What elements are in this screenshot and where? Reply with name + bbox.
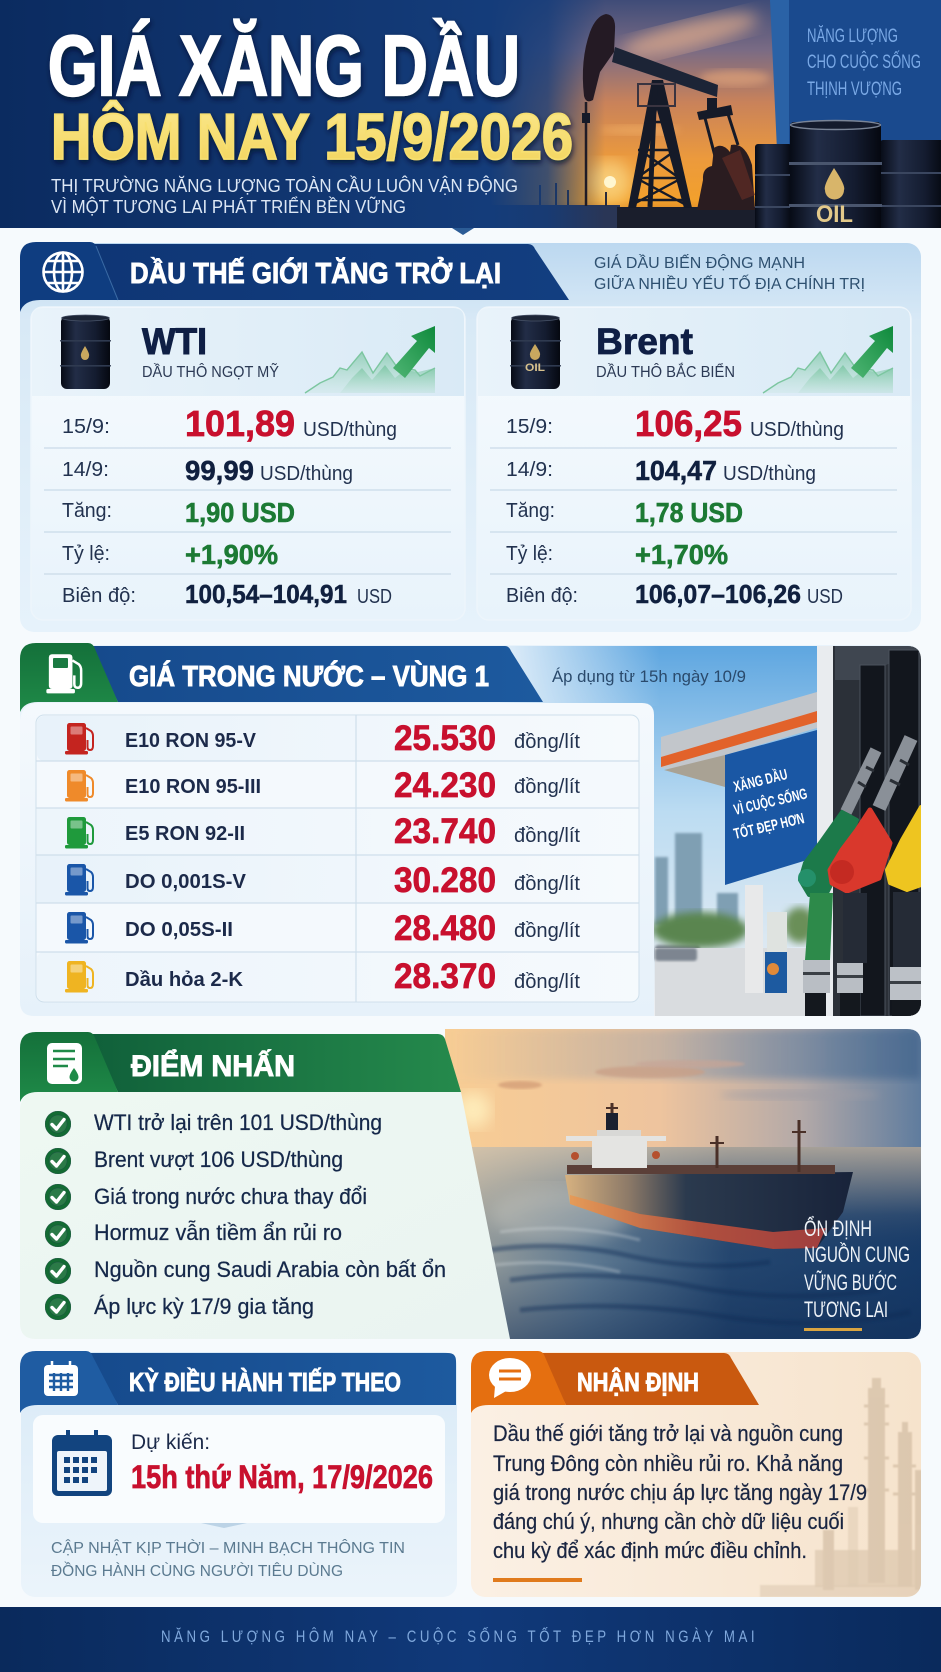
- header ribbon: domestic: [20, 643, 543, 712]
- fuel dispenser: [817, 646, 923, 1016]
- Brent rows: 1,78 USD: [635, 497, 743, 528]
- station sign: XĂNG DẦU: [732, 766, 789, 796]
- photo caption: ỔN ĐỊNH: [804, 1216, 872, 1241]
- Brent rows: 106,07–106,26: [635, 579, 801, 609]
- assessment body: Dầu thế giới tăng trở lại và nguồn cung: [493, 1421, 843, 1446]
- nozzle: green: [798, 750, 876, 1016]
- WTI barrel: [60, 315, 111, 389]
- panel: next adjustment: [20, 1351, 457, 1597]
- highlights list background: [20, 1092, 510, 1339]
- hero banner: [0, 0, 941, 234]
- tanker: [565, 1103, 853, 1249]
- row: E10 RON 95-III: E10 RON 95-III: [125, 776, 261, 798]
- header ribbon: world oil: DẦU THẾ GIỚI TĂNG TRỞ LẠI: [130, 256, 501, 290]
- Brent rows: [490, 403, 897, 609]
- WTI rows: 14/9:: [62, 459, 109, 481]
- panel: world oil: [20, 242, 921, 632]
- icon: speech bubble: [489, 1358, 531, 1398]
- WTI trend chart: [305, 326, 435, 393]
- icon: large calendar: [52, 1430, 112, 1496]
- Brent barrel: [510, 315, 561, 389]
- oil barrels: [755, 120, 941, 234]
- expected label: Dự kiến:: [131, 1431, 210, 1454]
- header ribbon: highlights: ĐIỂM NHẤN: [131, 1049, 295, 1083]
- header ribbon: world oil: [20, 242, 569, 312]
- Brent barrel: OIL: [525, 362, 545, 374]
- header ribbon: assessment: [471, 1351, 759, 1413]
- WTI rows: USD: [357, 586, 392, 608]
- header ribbon: assessment: NHẬN ĐỊNH: [577, 1367, 699, 1397]
- Brent rows: USD/thùng: [750, 419, 844, 441]
- Brent trend chart: [763, 326, 893, 393]
- commitment note: ĐỒNG HÀNH CÙNG NGƯỜI TIÊU DÙNG: [51, 1561, 343, 1580]
- WTI rows: Tăng:: [62, 500, 112, 522]
- assessment body: giá trong nước chịu áp lực tăng ngày 17/9: [493, 1480, 867, 1505]
- highlights list: [45, 1110, 446, 1320]
- header ribbon: domestic: GIÁ TRONG NƯỚC – VÙNG 1: [129, 659, 489, 693]
- WTI rows: Tỷ lệ:: [62, 543, 110, 565]
- header ribbon: next adjustment: [20, 1351, 456, 1413]
- pumpjack silhouette: [582, 14, 755, 210]
- hero tagline panel: NĂNG LƯỢNG: [807, 26, 898, 47]
- icon: globe: [44, 252, 82, 292]
- accent bar: [493, 1578, 582, 1582]
- WTI rows: USD/thùng: [303, 419, 397, 441]
- hero sunset photo: [490, 0, 780, 228]
- row: E10 RON 95-V: đồng/lít: [514, 731, 580, 753]
- station sign: VÌ CUỘC SỐNG: [732, 784, 809, 819]
- row: E5 RON 92-II: 23.740: [394, 812, 496, 851]
- oil barrels: OIL: [816, 201, 853, 228]
- station sign: TỐT ĐẸP HƠN: [732, 809, 806, 843]
- Brent rows: Tăng:: [506, 500, 555, 522]
- assessment body: Trung Đông còn nhiều rủi ro. Khả năng: [493, 1451, 843, 1476]
- title line 1: GIÁ XĂNG DẦU: [48, 18, 520, 114]
- panel: domestic prices: [20, 643, 923, 1016]
- WTI subtitle: DẦU THÔ NGỌT MỸ: [142, 361, 279, 381]
- panel: assessment: [471, 1351, 923, 1597]
- WTI name: WTI: [142, 321, 207, 362]
- price table: [36, 715, 639, 1002]
- title line 2: HÔM NAY 15/9/2026: [51, 100, 573, 173]
- header ribbon: next adjustment: KỲ ĐIỀU HÀNH TIẾP THEO: [129, 1367, 401, 1397]
- WTI rows: 101,89: [185, 403, 295, 444]
- header note: GIỮA NHIỀU YẾU TỐ ĐỊA CHÍNH TRỊ: [594, 273, 865, 293]
- row: E5 RON 92-II: [65, 812, 580, 851]
- highlights list: WTI trở lại trên 101 USD/thùng: [94, 1110, 382, 1135]
- WTI rows: Biên độ:: [62, 585, 136, 607]
- hero subtitle: THỊ TRƯỜNG NĂNG LƯỢNG TOÀN CẦU LUÔN VẬN ĐỘNG: [51, 175, 518, 196]
- assessment body: [493, 1421, 867, 1563]
- panel: highlights: [20, 1029, 921, 1339]
- hero tagline panel: THỊNH VƯỢNG: [807, 79, 902, 100]
- Brent subtitle: DẦU THÔ BẮC BIỂN: [596, 362, 735, 381]
- row: DO 0,05S-II: [65, 909, 580, 948]
- highlights list: Brent vượt 106 USD/thùng: [94, 1147, 343, 1172]
- photo: petrol station: [500, 646, 923, 1016]
- Brent rows: 106,25: [635, 403, 742, 444]
- Brent rows: 14/9:: [506, 459, 553, 481]
- highlights list: Áp lực kỳ 17/9 gia tăng: [94, 1294, 314, 1319]
- Brent name: Brent: [596, 321, 693, 362]
- row: E5 RON 92-II: E5 RON 92-II: [125, 823, 245, 845]
- WTI rows: [44, 403, 451, 609]
- row: E5 RON 92-II: đồng/lít: [514, 825, 580, 847]
- commitment note: [51, 1538, 405, 1580]
- row: DO 0,05S-II: đồng/lít: [514, 920, 580, 942]
- left prices background: [20, 703, 654, 1016]
- row: DO 0,001S-V: đồng/lít: [514, 873, 580, 895]
- hero tagline panel: [770, 0, 941, 150]
- WTI rows: 15/9:: [62, 416, 110, 438]
- photo caption: VỮNG BƯỚC: [804, 1270, 897, 1295]
- footer: [0, 1607, 941, 1672]
- photo caption: TƯƠNG LAI: [804, 1297, 888, 1322]
- row: E10 RON 95-III: 24.230: [394, 766, 496, 805]
- row: E10 RON 95-III: đồng/lít: [514, 776, 580, 798]
- hero pointer arrow: [452, 228, 474, 235]
- Brent rows: 104,47: [635, 455, 717, 486]
- nozzle: red: [830, 738, 911, 1016]
- row: DO 0,05S-II: 28.480: [394, 909, 496, 948]
- WTI rows: 99,99: [185, 455, 254, 486]
- highlights list: Nguồn cung Saudi Arabia còn bất ổn: [94, 1257, 446, 1282]
- highlights list: Hormuz vẫn tiềm ẩn rủi ro: [94, 1220, 342, 1245]
- hero subtitle: VÌ MỘT TƯƠNG LAI PHÁT TRIỂN BỀN VỮNG: [51, 196, 406, 217]
- hero subtitle: [51, 175, 518, 217]
- row: E10 RON 95-V: E10 RON 95-V: [125, 730, 257, 752]
- icon: white fuel pump: [46, 654, 81, 693]
- Brent rows: USD: [807, 586, 843, 608]
- effective time note: Áp dụng từ 15h ngày 10/9: [552, 667, 746, 686]
- header ribbon: highlights: [20, 1032, 461, 1102]
- header note: GIÁ DẦU BIẾN ĐỘNG MẠNH: [594, 253, 805, 272]
- row: E10 RON 95-V: [65, 719, 580, 758]
- Brent rows: +1,70%: [635, 539, 728, 570]
- row: DO 0,001S-V: DO 0,001S-V: [125, 871, 247, 893]
- card: Brent: [477, 307, 911, 620]
- expected date: 15h thứ Năm, 17/9/2026: [131, 1459, 433, 1495]
- Brent rows: 15/9:: [506, 416, 553, 438]
- WTI rows: +1,90%: [185, 539, 278, 570]
- Brent rows: Biên độ:: [506, 585, 578, 607]
- row: Dầu hỏa 2-K: đồng/lít: [514, 971, 580, 993]
- station sign: [725, 730, 817, 885]
- photo caption: [804, 1216, 910, 1331]
- assessment body: đáng chú ý, nhưng cần chờ dữ liệu cuối: [493, 1509, 844, 1534]
- WTI rows: USD/thùng: [260, 463, 353, 485]
- row: DO 0,001S-V: 30.280: [394, 861, 496, 900]
- row: DO 0,001S-V: [65, 861, 580, 900]
- small pointer: [201, 1523, 247, 1528]
- row: Dầu hỏa 2-K: Dầu hỏa 2-K: [125, 969, 244, 991]
- icon: small calendar: [44, 1361, 78, 1396]
- WTI rows: 100,54–104,91: [185, 579, 347, 609]
- highlights list: Giá trong nước chưa thay đổi: [94, 1184, 367, 1209]
- photo: oil tanker at sea: [445, 1029, 921, 1339]
- row: E10 RON 95-V: 25.530: [394, 719, 496, 758]
- header note: [594, 253, 865, 293]
- refinery background: [760, 1378, 923, 1597]
- row: Dầu hỏa 2-K: [65, 957, 580, 996]
- assessment body: chu kỳ để xác định mức điều chỉnh.: [493, 1538, 807, 1563]
- row: DO 0,05S-II: DO 0,05S-II: [125, 919, 233, 941]
- footer: NĂNG LƯỢNG HÔM NAY – CUỘC SỐNG TỐT ĐẸP HƠN NGÀY MAI: [161, 1626, 755, 1646]
- icon: document with drop: [47, 1043, 82, 1084]
- Brent rows: Tỷ lệ:: [506, 543, 553, 565]
- row: Dầu hỏa 2-K: 28.370: [394, 957, 496, 996]
- commitment note: CẬP NHẬT KỊP THỜI – MINH BẠCH THÔNG TIN: [51, 1538, 405, 1557]
- nozzle: yellow: [887, 807, 921, 1016]
- Brent rows: USD/thùng: [723, 463, 816, 485]
- card: WTI: [31, 307, 465, 620]
- date card: [33, 1415, 445, 1523]
- WTI rows: 1,90 USD: [185, 497, 295, 528]
- row: E10 RON 95-III: [65, 766, 580, 805]
